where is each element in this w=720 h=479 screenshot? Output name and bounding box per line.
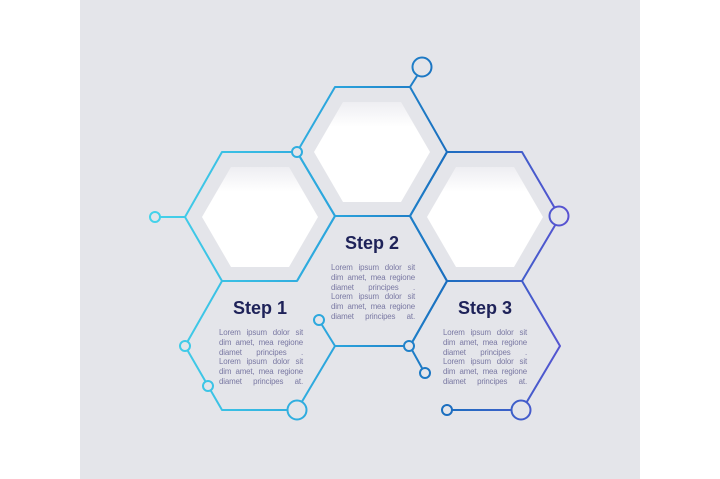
step 2 text <box>331 263 416 321</box>
step 2 text: Lorem ipsum dolor sit <box>331 263 415 272</box>
step 1 text: Lorem ipsum dolor sit <box>219 357 303 366</box>
step 1 text: diamet principes at. <box>219 377 303 386</box>
step 2 text: dim amet, mea regione <box>331 302 415 311</box>
step 2 title: Step 2 <box>345 233 399 253</box>
step 1 text: Lorem ipsum dolor sit <box>219 328 303 337</box>
step 3 text: diamet principes . <box>443 348 527 357</box>
step 3 text <box>443 328 528 386</box>
step 2 text: diamet principes at. <box>331 312 415 321</box>
step 2 text: dim amet, mea regione <box>331 273 415 282</box>
step 1 text: dim amet, mea regione <box>219 338 303 347</box>
step 2 text: Lorem ipsum dolor sit <box>331 292 415 301</box>
inner white hexes <box>202 102 543 267</box>
step 3 text: diamet principes at. <box>443 377 527 386</box>
step 3 text: Lorem ipsum dolor sit <box>443 328 527 337</box>
background panel <box>80 0 640 479</box>
step 1 text: diamet principes . <box>219 348 303 357</box>
step 3 text: Lorem ipsum dolor sit <box>443 357 527 366</box>
hex outlines <box>160 76 560 410</box>
step 1 title: Step 1 <box>233 298 287 318</box>
connector circles <box>150 58 568 420</box>
step 1 text <box>219 328 304 386</box>
step 1 text: dim amet, mea regione <box>219 367 303 376</box>
step 2 text: diamet principes . <box>331 283 415 292</box>
step 3 text: dim amet, mea regione <box>443 338 527 347</box>
step 3 text: dim amet, mea regione <box>443 367 527 376</box>
step 3 title: Step 3 <box>458 298 512 318</box>
